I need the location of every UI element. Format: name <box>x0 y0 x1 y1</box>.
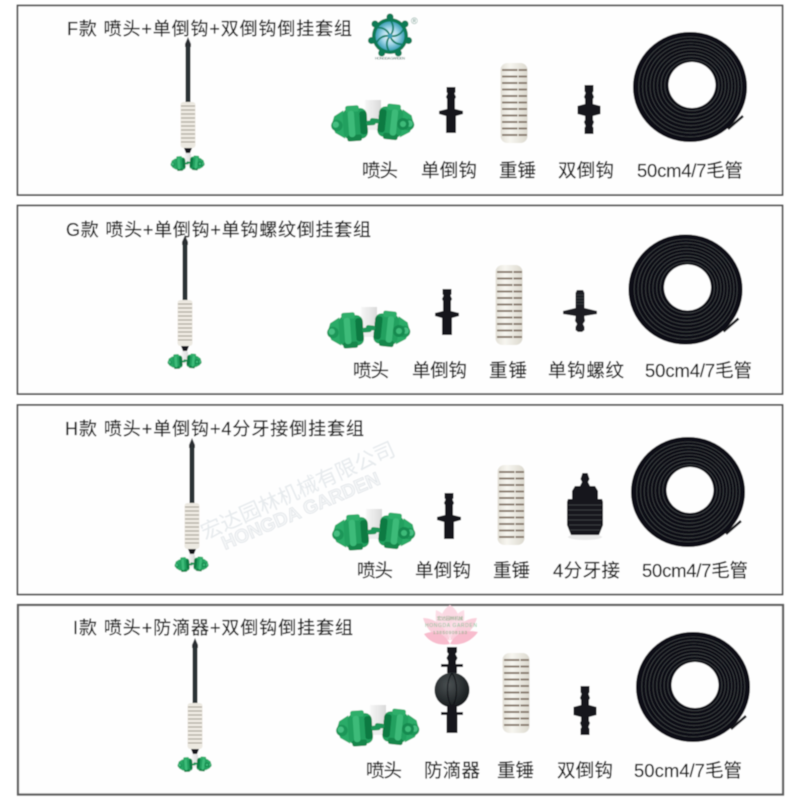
icon: capillary tube coil <box>631 437 745 547</box>
icon: weight <box>496 265 522 345</box>
label: tube: 50cm4/7毛管 <box>642 560 748 581</box>
label: nozzle: 喷头 <box>353 360 389 381</box>
watermark: company name: 宏达园林机械有限公司 <box>198 438 399 545</box>
panel: I set <box>18 605 783 794</box>
label: tube: 50cm4/7毛管 <box>637 160 743 181</box>
heading: F set: F款 喷头+单倒钩+双倒钩倒挂套组 <box>67 19 352 39</box>
label: anti-drip valve: 防滴器 <box>424 760 480 781</box>
icon: lotus watermark: HONGDA GARDEN <box>425 623 477 629</box>
label: nozzle: 喷头 <box>366 760 402 781</box>
icon: capillary tube coil <box>628 234 742 344</box>
icon: nozzle <box>331 509 417 552</box>
heading: H set: H款 喷头+单倒钩+4分牙接倒挂套组 <box>65 419 364 439</box>
icon: double barb <box>574 686 596 735</box>
icon: single barb <box>435 289 459 335</box>
icon: double barb <box>578 85 600 134</box>
icon: nozzle <box>335 705 421 748</box>
panel: G set <box>18 206 782 394</box>
icon: anti-drip valve <box>434 647 470 733</box>
icon: weight <box>502 653 530 733</box>
watermark: company name: HONGDA GARDEN <box>219 469 383 555</box>
icon: nozzle <box>330 100 416 143</box>
label: nozzle: 喷头 <box>362 160 398 181</box>
heading: I set: I款 喷头+防滴器+双倒钩倒挂套组 <box>73 618 353 638</box>
icon: capillary tube coil <box>633 32 747 142</box>
label: tube: 50cm4/7毛管 <box>645 360 752 381</box>
icon: company logo: ® <box>411 16 418 26</box>
icon: company logo <box>368 14 418 60</box>
icon: lotus watermark: 13850908183 <box>433 630 467 635</box>
icon: lotus watermark: 宏达园林机械 <box>437 615 464 622</box>
icon: single barb thread <box>563 290 597 332</box>
icon: nozzle <box>326 307 412 350</box>
hanging assembly <box>170 37 205 172</box>
label: weight: 重锤 <box>489 360 527 381</box>
heading: G set: G款 喷头+单倒钩+单钩螺纹倒挂套组 <box>66 220 371 240</box>
label: single barb thread: 单钩螺纹 <box>548 360 624 381</box>
panel: H set <box>18 405 782 594</box>
label: threaded adapter: 4分牙接 <box>553 560 620 581</box>
icon: weight <box>500 63 528 143</box>
icon: company logo: HONGDA GARDEN <box>375 56 405 60</box>
label: double barb: 双倒钩 <box>558 160 614 181</box>
label: weight: 重锤 <box>493 560 530 581</box>
hanging assembly <box>174 438 209 573</box>
label: double barb: 双倒钩 <box>557 760 613 781</box>
icon: single barb <box>439 87 463 133</box>
label: single barb: 单倒钩 <box>412 360 467 381</box>
label: single barb: 单倒钩 <box>415 560 471 581</box>
icon: weight <box>498 465 524 545</box>
icon: single barb <box>437 493 461 539</box>
label: nozzle: 喷头 <box>357 560 393 581</box>
hanging assembly <box>167 235 202 370</box>
label: weight: 重锤 <box>499 160 536 181</box>
label: weight: 重锤 <box>497 760 534 781</box>
icon: lotus watermark <box>423 605 478 645</box>
icon: capillary tube coil <box>636 632 750 742</box>
label: tube: 50cm4/7毛管 <box>634 760 742 781</box>
panel: F set <box>18 6 782 195</box>
hanging assembly <box>177 638 212 773</box>
icon: threaded adapter <box>567 473 603 540</box>
label: single barb: 单倒钩 <box>421 160 477 181</box>
